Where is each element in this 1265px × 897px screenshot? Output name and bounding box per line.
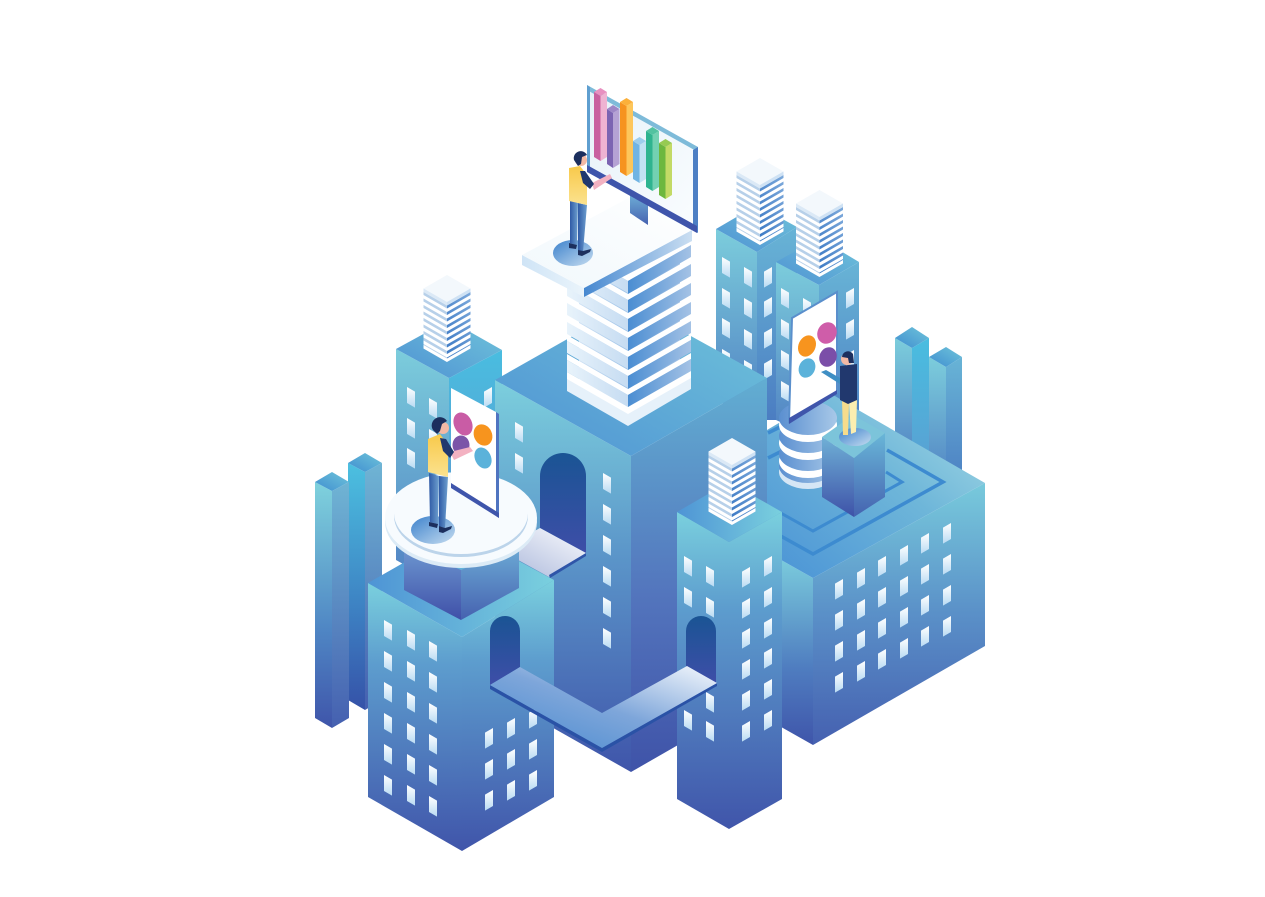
central building: [495, 303, 767, 772]
monitor stand: [630, 195, 648, 225]
platform pedestal: [404, 545, 519, 620]
arch floor: [500, 528, 586, 577]
pedestal block: [822, 415, 885, 517]
server stack on back tower B: [796, 190, 843, 277]
top slab: [522, 195, 692, 297]
left front tower: [368, 530, 554, 851]
person: right: [821, 351, 857, 435]
left pillars: [315, 453, 382, 728]
central server stack: [567, 239, 691, 426]
display board: left: [450, 388, 499, 518]
server stack on back tower A: [736, 158, 784, 245]
back left tower: [396, 320, 502, 590]
round platform: [385, 472, 537, 568]
bar chart: [594, 88, 672, 199]
walkway: [490, 666, 717, 752]
left tower arch: [490, 616, 520, 685]
striped cylinder: [779, 401, 837, 489]
floor square markings: [768, 426, 943, 554]
big right building: [767, 393, 985, 745]
monitor: [587, 85, 698, 233]
right pillars: [895, 327, 962, 490]
display board: right: [789, 292, 840, 424]
right front tower: [677, 482, 782, 829]
central arch: [540, 453, 586, 553]
back tower A: [716, 205, 797, 420]
server stack on right front tower: [708, 438, 756, 525]
person: top: [553, 151, 612, 266]
back tower B: [776, 238, 859, 440]
server stack on back left tower: [424, 275, 470, 362]
right tower arch: [686, 616, 716, 683]
person: left: [411, 417, 473, 544]
